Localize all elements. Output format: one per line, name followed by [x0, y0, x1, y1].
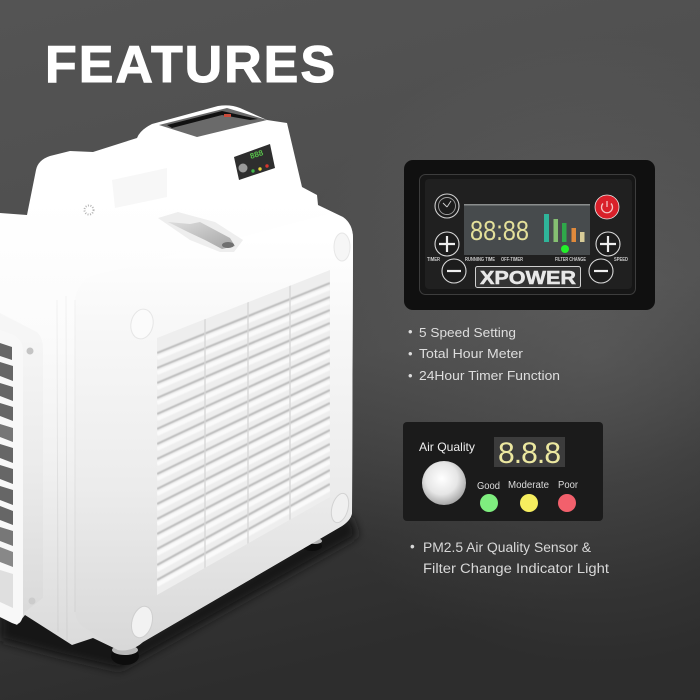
- panel: control display: [404, 160, 655, 310]
- side grille: [0, 313, 43, 625]
- top control panel: [159, 108, 267, 137]
- control bezel: [420, 174, 636, 294]
- indicator good: Good: [477, 481, 500, 492]
- foot: rear right: [302, 538, 322, 551]
- indicator moderate: Moderate: [508, 480, 549, 491]
- digit display: 8.8.8: [498, 437, 561, 470]
- control labels: OFF-TIMER: [501, 257, 523, 263]
- handle opening: [112, 168, 167, 208]
- front panel: [75, 213, 353, 650]
- timer digits: 88:88: [470, 215, 529, 246]
- foot: front left: [111, 645, 139, 665]
- feature list: control: Total Hour Meter: [419, 346, 524, 361]
- indicator poor: [558, 480, 579, 512]
- indicator poor: Poor: [558, 480, 579, 491]
- speaker holes: [84, 206, 94, 214]
- small air quality panel: 888: [249, 148, 265, 161]
- speed bars: [544, 214, 584, 242]
- icon: power button: [595, 195, 619, 219]
- feature list: air quality: •: [410, 539, 415, 554]
- control labels: SPEED: [614, 257, 628, 263]
- small air quality panel: [234, 144, 275, 180]
- icon: timer minus: [442, 259, 466, 283]
- filter change light: [561, 245, 569, 253]
- feature list: control: 5 Speed Setting: [419, 325, 516, 340]
- latch: [158, 212, 243, 252]
- unit silhouette: [0, 105, 353, 650]
- control labels: TIMER: [427, 257, 440, 263]
- feature list: air quality: Filter Change Indicator Light: [423, 561, 609, 576]
- feature list: air quality: [410, 539, 609, 576]
- control labels: [427, 257, 628, 263]
- icon: speed plus: [596, 232, 620, 256]
- icon: timer plus: [435, 232, 459, 256]
- control labels: RUNNING TIME: [465, 257, 495, 263]
- air purifier product: [0, 105, 353, 665]
- indicator good: [477, 481, 500, 512]
- feature list: air quality: PM2.5 Air Quality Sensor &: [423, 540, 591, 555]
- title: FEATURES: [45, 36, 335, 94]
- corner caps: [128, 233, 352, 640]
- panel seams: [57, 296, 75, 640]
- icon: clock button: [435, 194, 459, 218]
- floor shadow: [0, 515, 358, 670]
- feature list: control: [408, 324, 560, 383]
- panel: air quality: [403, 422, 603, 521]
- xpower logo: XPOWER: [480, 267, 576, 288]
- air quality label: Air Quality: [419, 440, 475, 454]
- indicator moderate: [508, 480, 549, 512]
- icon: speed minus: [589, 259, 613, 283]
- feature list: control: •: [408, 324, 413, 339]
- side screws: [26, 348, 36, 604]
- feature list: control: •: [408, 368, 413, 383]
- sensor knob: [422, 461, 466, 505]
- feature list: control: 24Hour Timer Function: [419, 368, 560, 383]
- front louvre grille: [157, 270, 330, 595]
- feature list: control: •: [408, 346, 413, 361]
- lcd screen: [464, 204, 590, 255]
- control labels: FILTER CHANGE: [555, 257, 586, 263]
